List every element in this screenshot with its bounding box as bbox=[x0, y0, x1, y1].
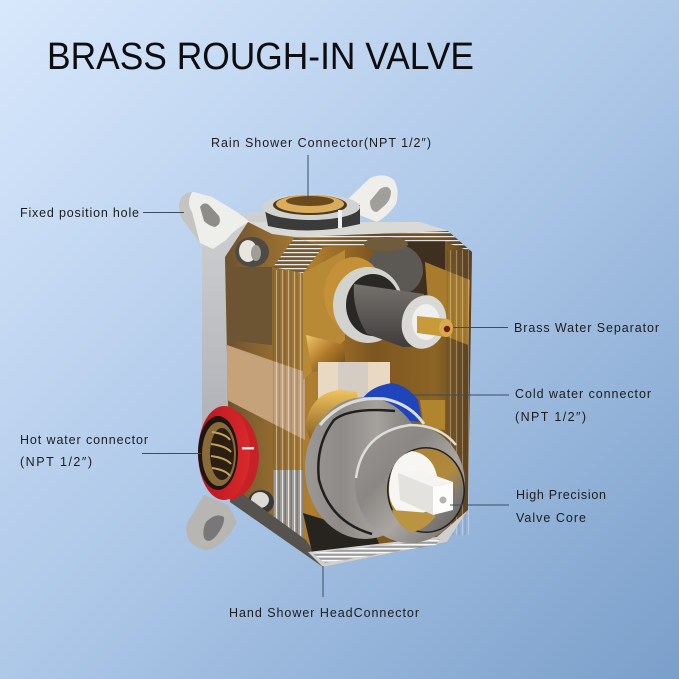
label: cold water connector bbox=[515, 387, 651, 424]
blue cold water ring bbox=[363, 383, 422, 422]
lower left screw bbox=[248, 490, 274, 514]
top-right screw bbox=[364, 237, 408, 251]
gold streak right bbox=[425, 262, 470, 345]
valve product illustration bbox=[179, 175, 472, 567]
gold lower right bbox=[420, 400, 445, 430]
dark grey ring behind cartridge bbox=[367, 244, 423, 296]
large valve sleeve bbox=[305, 397, 425, 539]
brass upper body bbox=[303, 250, 345, 380]
interior cream wall bbox=[227, 345, 305, 440]
top cartridge: grey ring bbox=[333, 267, 403, 343]
cream upright bbox=[318, 362, 390, 407]
top-left screw bbox=[235, 237, 269, 267]
label: hot water connector: (NPT 1/2″) bbox=[20, 455, 92, 469]
side wall bbox=[202, 210, 272, 500]
brass foot bbox=[306, 335, 345, 372]
brass elbow bbox=[305, 390, 360, 440]
interior brown panel bbox=[227, 267, 272, 345]
valve mid sleeve bbox=[355, 425, 465, 543]
valve core square spindle bbox=[398, 470, 453, 515]
leader: hot water connector bbox=[142, 452, 201, 454]
top face bbox=[248, 222, 448, 237]
label: rain shower connector: Rain Shower Connector(NPT 1/2″) bbox=[211, 136, 431, 150]
label: cold water connector: Cold water connector bbox=[515, 387, 651, 401]
top cartridge: brass collar bbox=[324, 257, 384, 331]
label: high precision valve core: High Precision bbox=[516, 488, 606, 502]
right column ribs bbox=[445, 250, 470, 535]
label: hot water connector bbox=[20, 433, 148, 469]
leader: high precision valve core bbox=[450, 504, 509, 506]
mounting tab: top right bbox=[347, 175, 398, 222]
mounting tab: bottom left bbox=[186, 495, 237, 550]
housing interior bbox=[225, 222, 472, 567]
brass spline pin bbox=[417, 316, 453, 337]
threaded hole bbox=[202, 422, 236, 486]
top cartridge: end cap bbox=[396, 290, 452, 354]
leader: fixed position hole bbox=[143, 212, 184, 214]
label: cold water connector: (NPT 1/2″) bbox=[515, 410, 586, 424]
label: fixed position hole: Fixed position hole bbox=[20, 206, 139, 220]
left column ribs, upper bbox=[273, 270, 303, 470]
chamfer ribs bbox=[273, 237, 323, 273]
label: hand shower head connector: Hand Shower HeadConnector bbox=[229, 606, 419, 620]
mounting tab: top left bbox=[179, 192, 250, 249]
left column ribs, lower bbox=[273, 470, 303, 553]
dark upper right interior bbox=[385, 240, 445, 320]
label: high precision valve core bbox=[516, 488, 606, 525]
leader: cold water connector bbox=[408, 394, 509, 396]
grey upright bbox=[338, 362, 368, 397]
leader: hand shower connector bbox=[322, 566, 324, 597]
label: brass water separator: Brass Water Separator bbox=[514, 321, 659, 335]
label: high precision valve core: Valve Core bbox=[516, 511, 586, 525]
title: BRASS ROUGH-IN VALVE bbox=[47, 36, 474, 78]
valve core opening bbox=[387, 447, 465, 533]
leader: rain shower connector bbox=[307, 155, 309, 199]
top port: rain shower connector bbox=[262, 194, 360, 231]
bottom face bbox=[230, 492, 468, 567]
red hot water ring bbox=[198, 406, 259, 500]
label: hot water connector: Hot water connector bbox=[20, 433, 148, 447]
top cartridge: stem bbox=[354, 284, 424, 347]
leader: brass water separator bbox=[453, 326, 508, 328]
